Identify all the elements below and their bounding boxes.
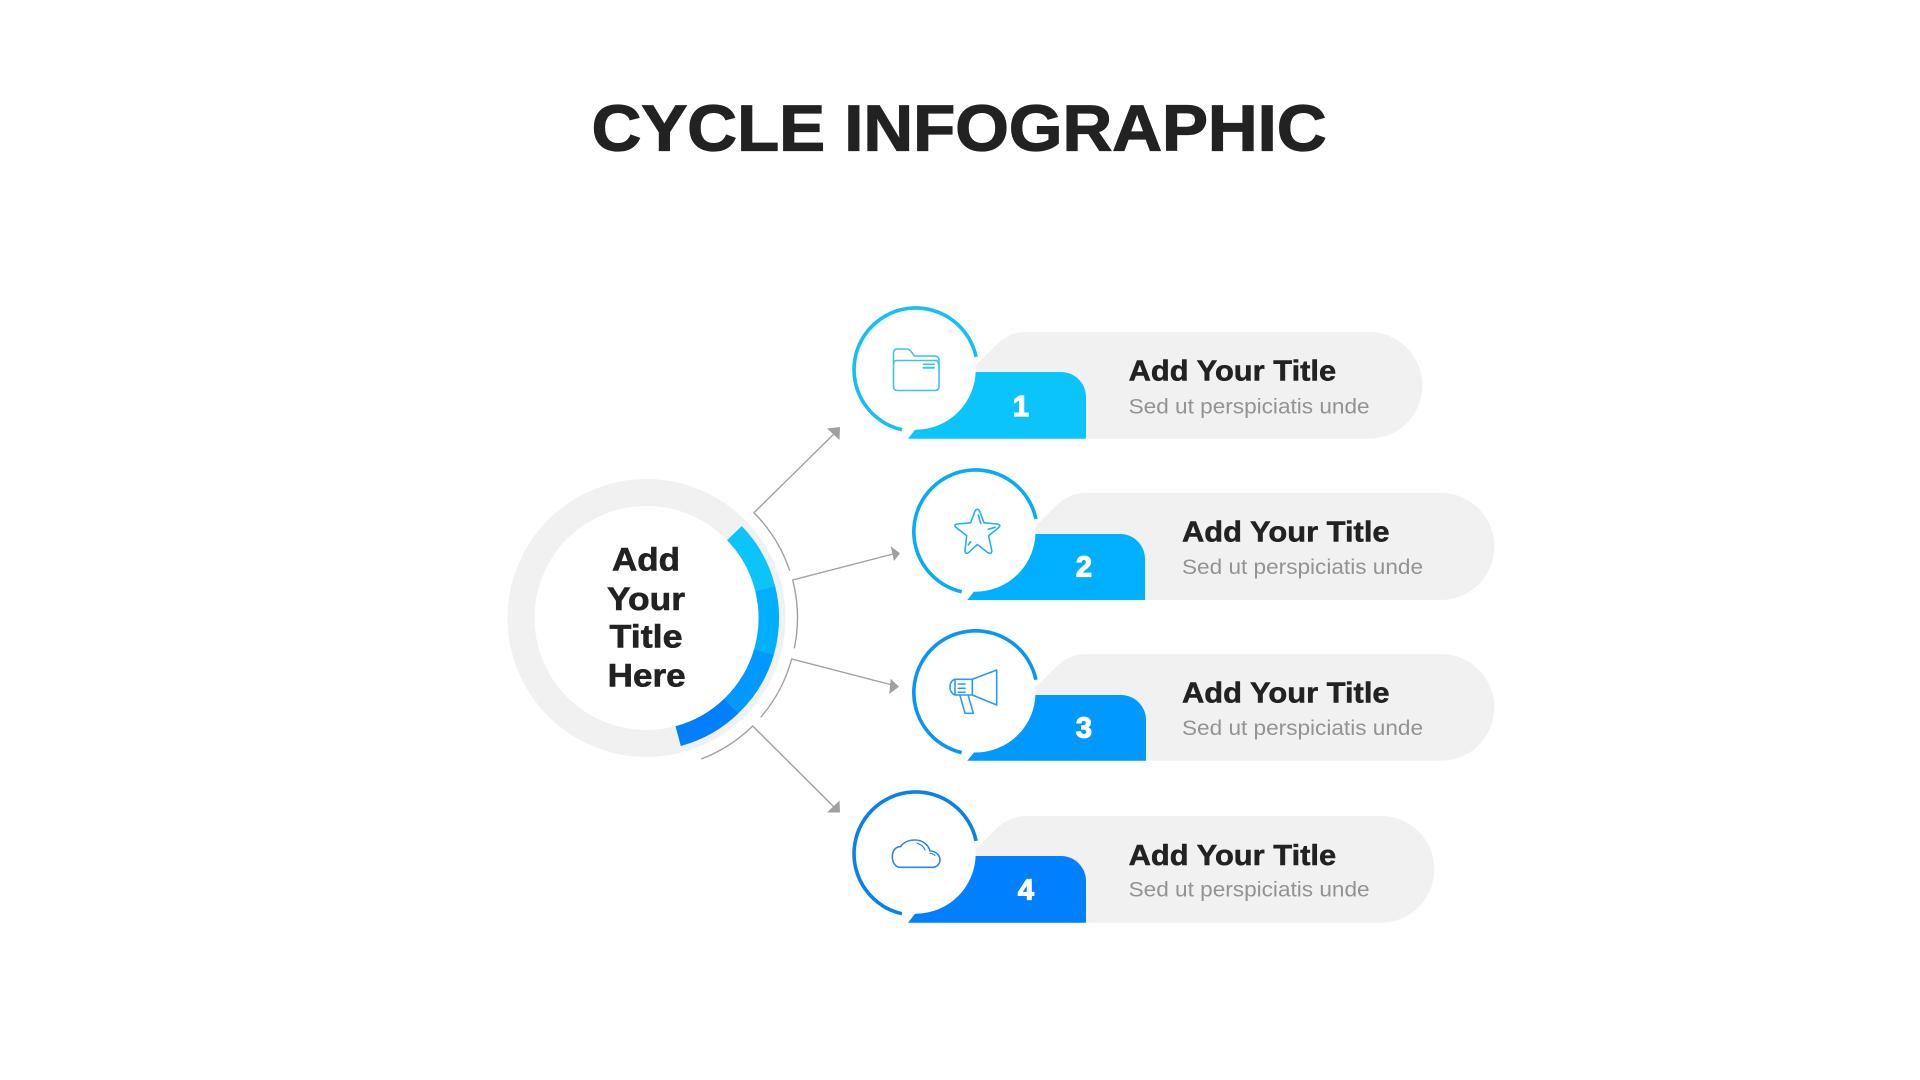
item 3 heading: Add Your Title bbox=[1182, 677, 1390, 709]
item 4 bbox=[854, 792, 1434, 923]
number tab 1 bbox=[908, 372, 1086, 439]
item 1 bbox=[854, 308, 1422, 439]
central title: Here bbox=[608, 658, 686, 694]
arrow 2 bbox=[793, 546, 900, 648]
icon: star bbox=[955, 509, 1000, 553]
icon circle 2 bbox=[914, 470, 1036, 592]
item 2 bbox=[914, 470, 1494, 600]
item 3 bbox=[914, 631, 1494, 761]
item 1 heading: Add Your Title bbox=[1129, 356, 1336, 388]
number 3: 3 bbox=[1076, 712, 1092, 744]
icon: cloud bbox=[892, 840, 940, 867]
arrow 3 bbox=[761, 659, 899, 717]
number 2: 2 bbox=[1076, 552, 1092, 584]
number tab 2 bbox=[967, 534, 1145, 600]
central title: Add bbox=[612, 542, 680, 578]
arrow 4 bbox=[701, 726, 840, 812]
number 1: 1 bbox=[1013, 391, 1029, 423]
central title bbox=[607, 542, 686, 694]
title: CYCLE INFOGRAPHIC bbox=[592, 92, 1327, 164]
pill 4 bbox=[960, 816, 1434, 923]
item 4 text: Sed ut perspiciatis unde bbox=[1129, 879, 1370, 902]
item 3 text: Sed ut perspiciatis unde bbox=[1182, 717, 1423, 740]
item 1 text: Sed ut perspiciatis unde bbox=[1129, 395, 1370, 418]
number tab 3 bbox=[967, 695, 1146, 761]
number 4: 4 bbox=[1018, 874, 1034, 906]
central ring bbox=[521, 492, 779, 746]
pill 1 bbox=[960, 332, 1422, 439]
number tab 4 bbox=[908, 856, 1086, 923]
central title: Your bbox=[607, 581, 685, 617]
icon circle 3 bbox=[914, 631, 1036, 753]
item 2 heading: Add Your Title bbox=[1182, 516, 1390, 548]
item 4 heading: Add Your Title bbox=[1129, 840, 1336, 872]
icon circle 1 bbox=[854, 308, 976, 430]
icon: megaphone bbox=[950, 670, 997, 713]
item 2 text: Sed ut perspiciatis unde bbox=[1182, 556, 1423, 579]
icon circle 4 bbox=[854, 792, 976, 914]
central title: Title bbox=[610, 618, 682, 654]
icon: folder bbox=[894, 349, 939, 390]
pill 3 bbox=[1020, 654, 1494, 761]
pill 2 bbox=[1020, 493, 1494, 600]
arrow 1 bbox=[754, 427, 840, 571]
